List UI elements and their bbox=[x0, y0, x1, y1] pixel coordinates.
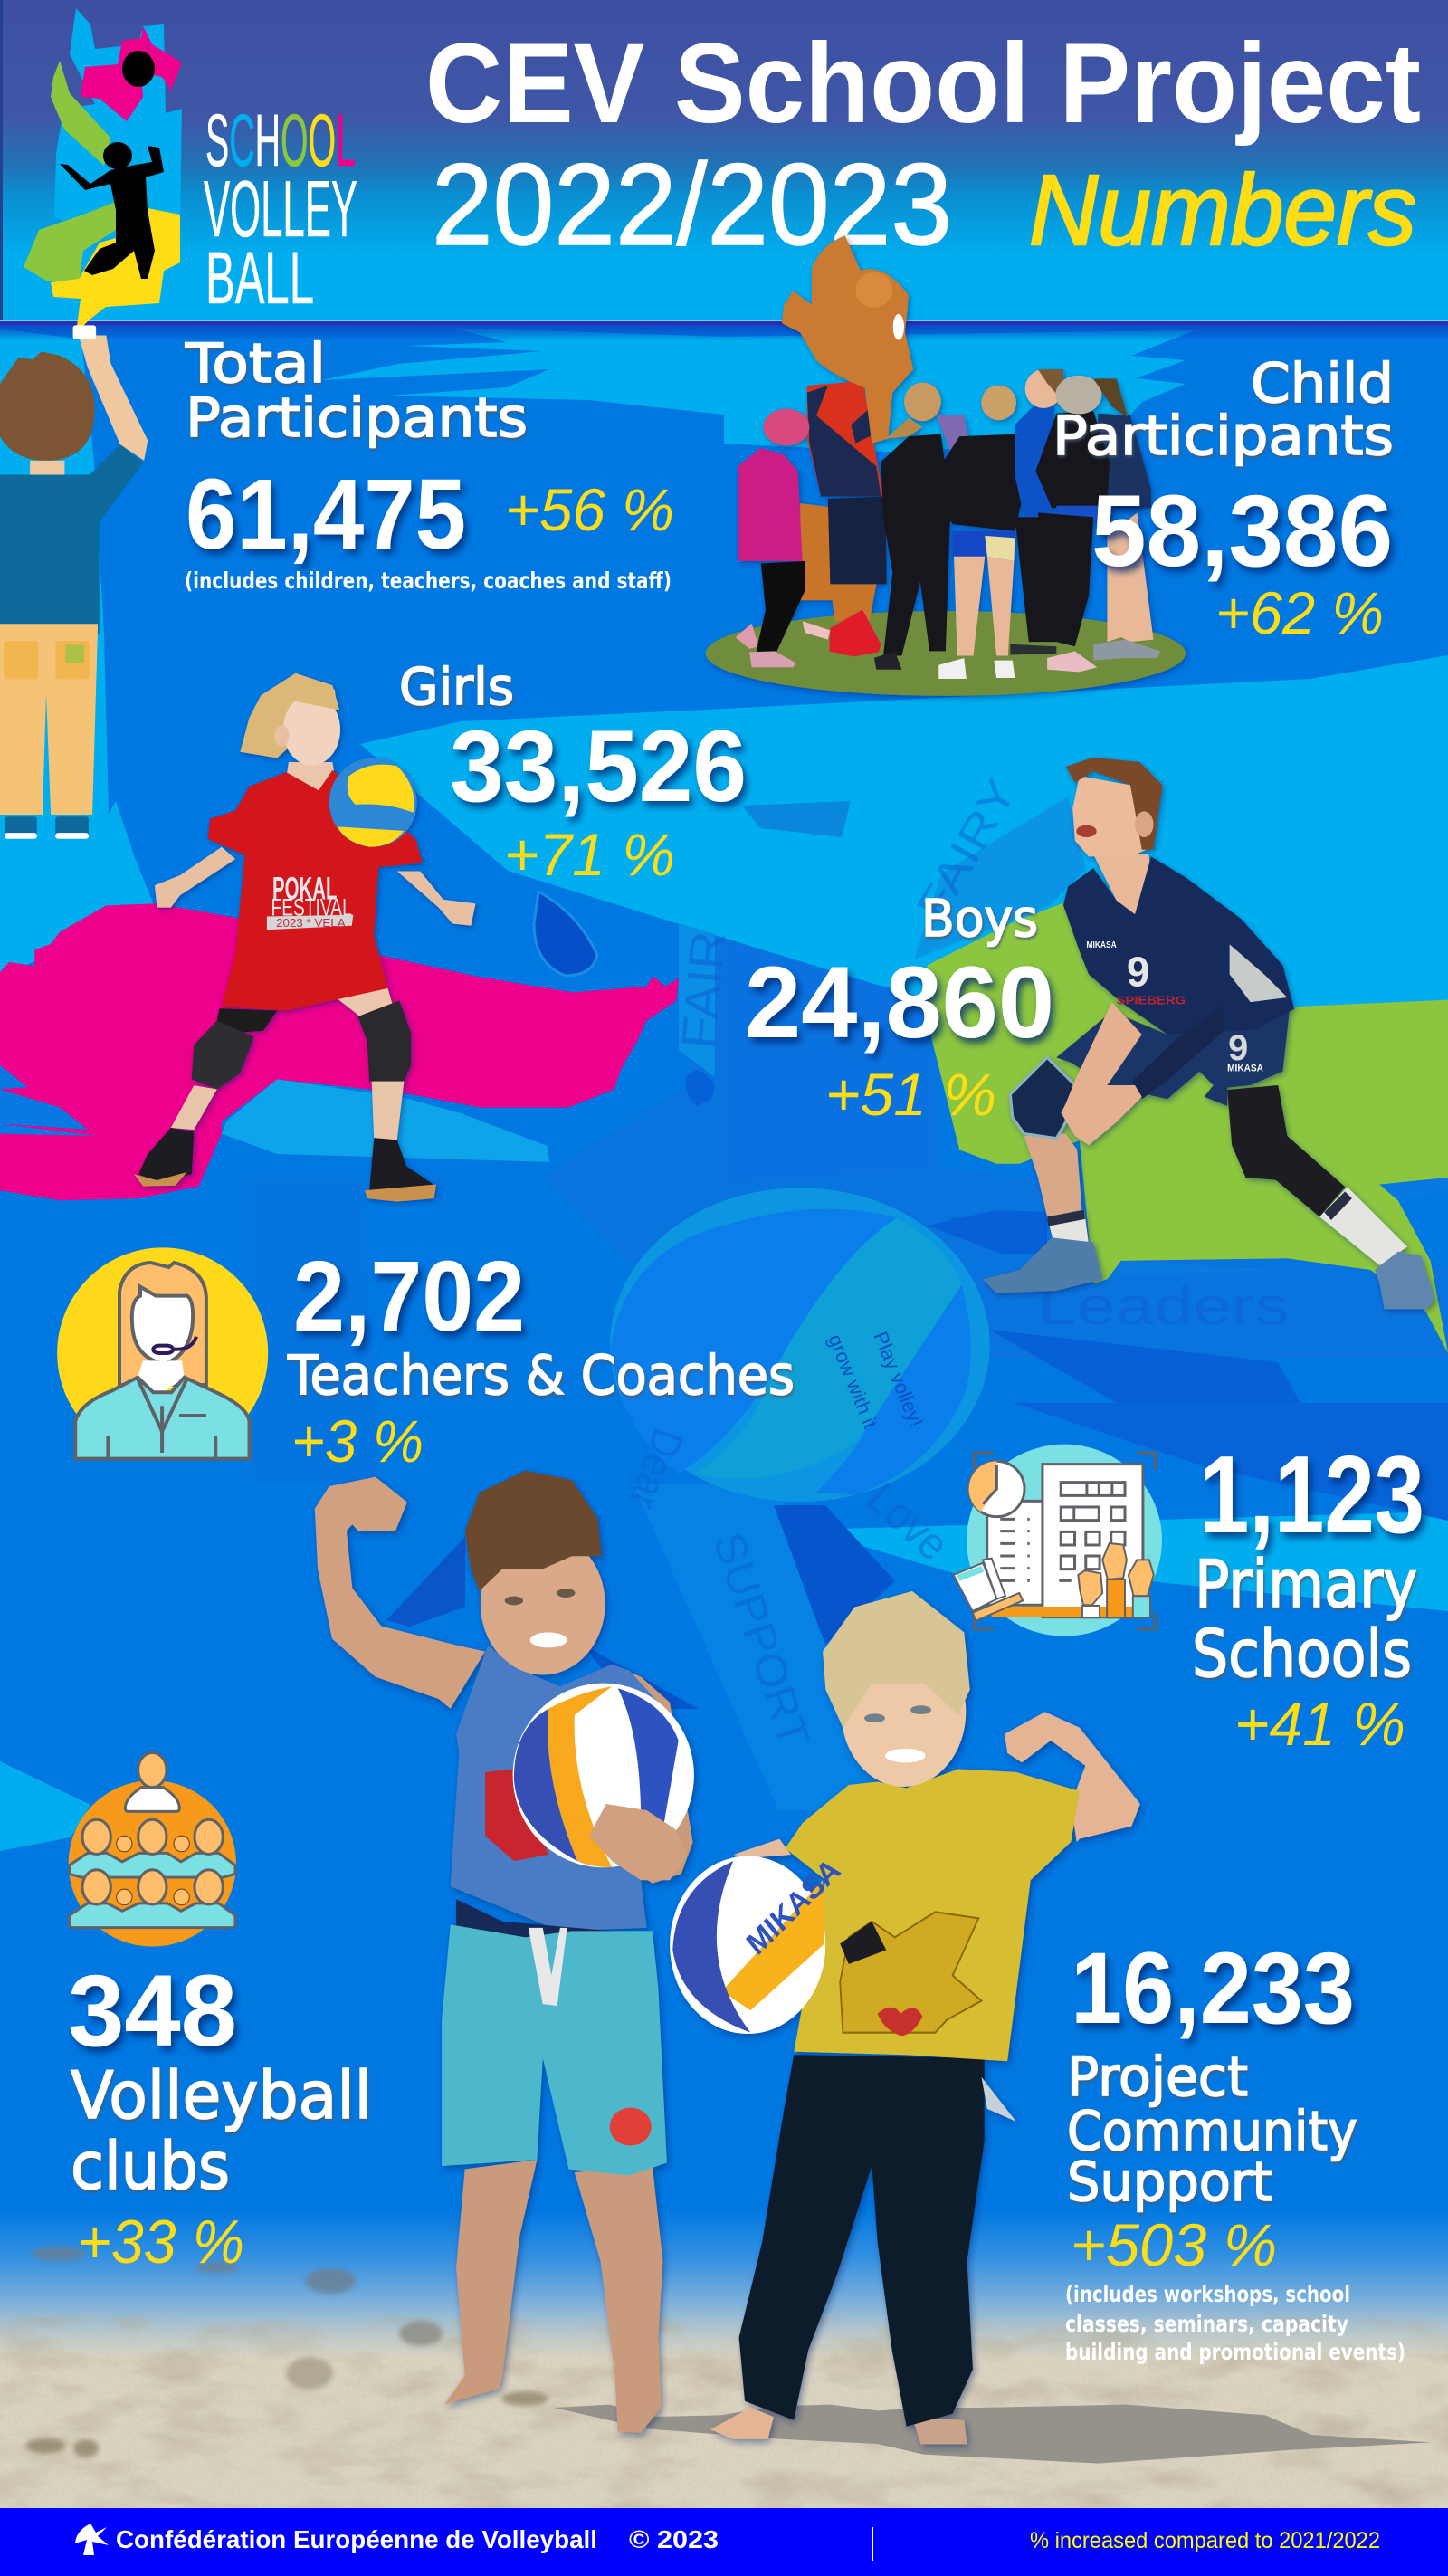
stat: primary schools: +41 % bbox=[1234, 1690, 1405, 1759]
stat: project community support: classes, seminars, capacity bbox=[1065, 2311, 1348, 2337]
stat: child participants: 58,386 bbox=[1091, 474, 1393, 587]
footer bar: % increased compared to 2021/2022 bbox=[1030, 2528, 1380, 2553]
photo: blond boy in yellow T-shirt with ball: MIKASA bbox=[741, 1852, 847, 1962]
stat: total participants: Total bbox=[185, 332, 326, 396]
icon: volleyball club group bbox=[69, 1752, 236, 1947]
illustration: boy drawing with chalk bbox=[0, 325, 148, 839]
photo: blond boy in yellow T-shirt with ball bbox=[670, 1591, 1140, 2444]
stat: volleyball clubs: +33 % bbox=[77, 2208, 244, 2276]
ghost volleyball in background bbox=[610, 1188, 990, 1502]
ghost handwriting on background: Play volley! bbox=[869, 1329, 928, 1430]
stat: project community support: +503 % bbox=[1071, 2211, 1277, 2278]
footer bar: Confédération Européenne de Volleyball bbox=[116, 2525, 597, 2553]
stat: child participants: Participants bbox=[1053, 405, 1394, 468]
photo: girl with yellow ball: POKAL bbox=[272, 871, 337, 906]
stat: volleyball clubs: 348 bbox=[68, 1954, 237, 2067]
magenta brush stroke bbox=[0, 903, 679, 1200]
sand ground bbox=[0, 2209, 1448, 2508]
stat: total participants: (includes children, teachers, coaches and staff) bbox=[185, 568, 672, 594]
logo: School Volleyball bbox=[24, 8, 357, 333]
title: 2022/2023 bbox=[432, 140, 952, 270]
divider glow under header bbox=[0, 325, 1448, 341]
title bbox=[425, 21, 1421, 270]
stat: total participants: 61,475 bbox=[186, 459, 466, 570]
photo: boy in navy kit: 9 bbox=[1127, 948, 1149, 995]
ghost teardrop and heart shapes bbox=[534, 892, 714, 1106]
photo: boy in navy kit: 9 bbox=[1228, 1028, 1248, 1068]
photo: girl with yellow ball bbox=[134, 673, 476, 1202]
stat: boys: +51 % bbox=[825, 1061, 996, 1128]
stat: girls: 33,526 bbox=[450, 710, 747, 823]
stat: teachers and coaches: +3 % bbox=[291, 1407, 424, 1474]
stat: primary schools: Schools bbox=[1192, 1616, 1412, 1692]
ghost handwriting on background: Love bbox=[858, 1473, 958, 1570]
stat: project community support: Support bbox=[1067, 2151, 1272, 2214]
icon: school building bbox=[954, 1445, 1162, 1636]
logo: School Volleyball: BALL bbox=[205, 237, 314, 320]
photo: boy in blue tank top with ball bbox=[315, 1471, 694, 2433]
lime green brush stroke bbox=[927, 902, 1448, 1353]
stat: volleyball clubs: Volleyball bbox=[71, 2057, 372, 2133]
photo: girl with yellow ball: 2023 * VELA bbox=[276, 917, 346, 930]
ghost handwriting on background: SUPPORT bbox=[704, 1527, 818, 1752]
stat: primary schools: Primary bbox=[1195, 1546, 1417, 1622]
photo: boy in navy kit bbox=[983, 758, 1435, 1309]
icon: teacher with headset bbox=[57, 1247, 268, 1459]
photo: boy in navy kit: MIKASA bbox=[1227, 1064, 1263, 1074]
ghost handwriting on background: FAIR bbox=[672, 929, 736, 1051]
stat: boys: Boys bbox=[921, 890, 1038, 949]
stat: volleyball clubs bbox=[68, 1954, 372, 2276]
stat: total participants bbox=[185, 332, 674, 594]
stat: girls bbox=[399, 658, 747, 888]
stat: project community support bbox=[1065, 1932, 1405, 2365]
stat: boys: 24,860 bbox=[745, 946, 1054, 1059]
photo: boy in navy kit: MIKASA bbox=[1087, 940, 1117, 950]
stat: project community support: Project bbox=[1067, 2046, 1248, 2109]
stat: child participants bbox=[1053, 352, 1394, 646]
photo: mascot and children on grass bbox=[706, 235, 1186, 696]
stat: teachers and coaches: 2,702 bbox=[293, 1241, 525, 1352]
background brush strokes bbox=[0, 328, 1448, 1851]
stat: child participants: Child bbox=[1251, 352, 1394, 415]
stat: girls: +71 % bbox=[504, 821, 675, 888]
ghost handwriting on background: grow with it bbox=[824, 1331, 882, 1432]
ghost handwriting on background: Dear bbox=[619, 1422, 691, 1515]
stat: total participants: Participants bbox=[186, 386, 528, 450]
text: VOLLEY bbox=[204, 164, 357, 253]
photo: boy in navy kit: SPIEBERG bbox=[1117, 994, 1186, 1007]
stat: teachers and coaches: Teachers & Coaches bbox=[287, 1344, 795, 1407]
logo: School Volleyball: SCHOOL bbox=[205, 100, 356, 182]
stat: girls: Girls bbox=[399, 658, 514, 717]
stat: project community support: 16,233 bbox=[1071, 1932, 1355, 2045]
stat: project community support: (includes workshops, school bbox=[1065, 2281, 1350, 2307]
footer bar: © 2023 bbox=[629, 2525, 719, 2553]
footer bar bbox=[0, 2508, 1448, 2576]
stat: primary schools bbox=[1192, 1433, 1424, 1759]
ghost handwriting on background: Leaders bbox=[1038, 1277, 1290, 1336]
photo: girl with yellow ball: FESTIVAL bbox=[271, 894, 352, 921]
stat: project community support: Community bbox=[1067, 2100, 1358, 2163]
title: Numbers bbox=[1029, 155, 1416, 266]
ghost handwriting on background: NIKE bbox=[950, 1211, 1005, 1241]
stat: total participants: +56 % bbox=[505, 476, 674, 543]
stat: boys bbox=[745, 890, 1054, 1128]
stat: teachers and coaches bbox=[287, 1241, 795, 1474]
ghost handwriting on background bbox=[619, 771, 1290, 1752]
stat: child participants: +62 % bbox=[1215, 579, 1384, 646]
ghost handwriting on background: FAIRY bbox=[909, 771, 1027, 929]
header band bbox=[0, 0, 1448, 325]
stat: volleyball clubs: clubs bbox=[71, 2128, 230, 2204]
